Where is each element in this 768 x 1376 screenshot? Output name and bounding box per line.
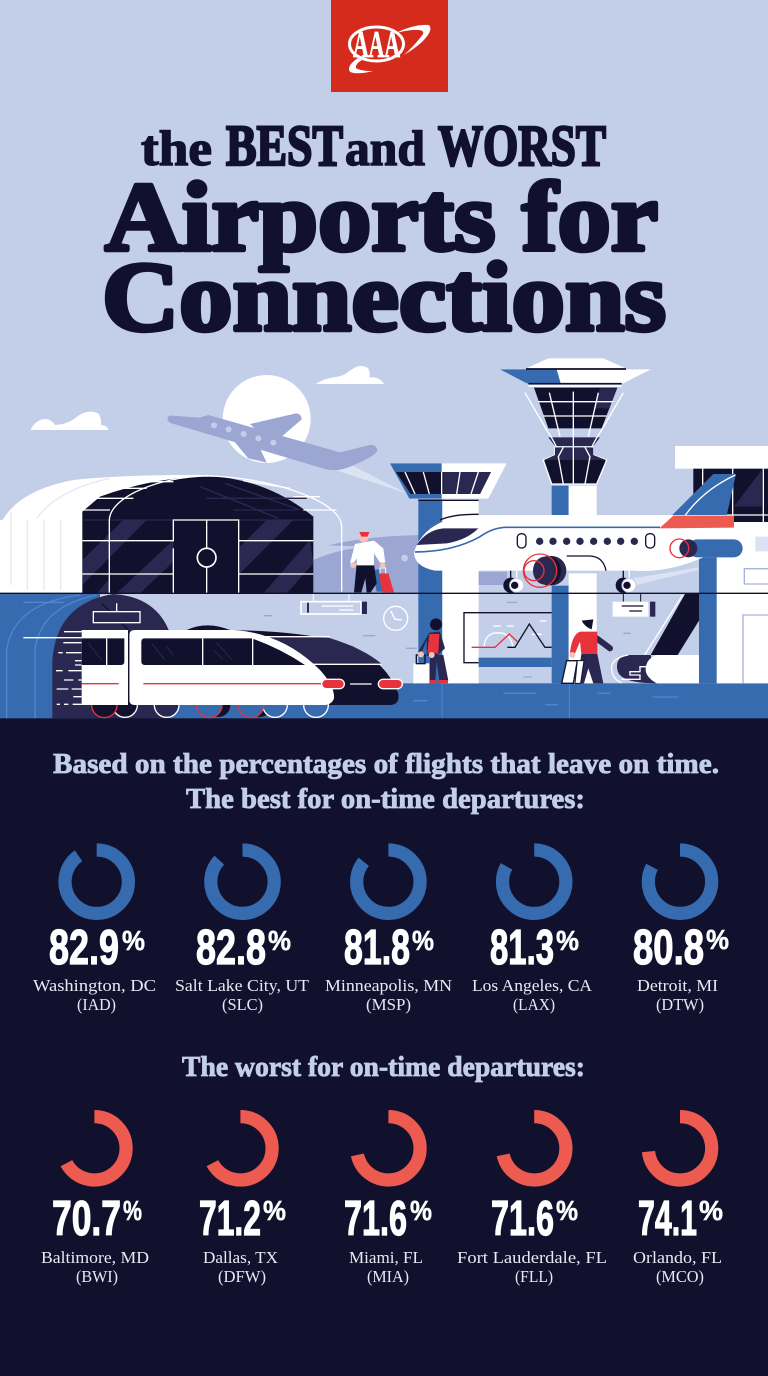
value: 71.6 [344,1192,407,1246]
value: 80.8 [633,921,704,975]
intro line 1: Based on the percentages of flights that leave on time. [53,749,719,780]
label [325,976,452,1014]
departures board [464,613,552,667]
cloud middle [316,366,384,384]
label: Baltimore, MD [41,1248,149,1267]
terminal building right [675,446,768,683]
stat: DTW [633,850,729,1014]
value: 82.8 [196,921,266,975]
label: Orlando, FL [633,1248,722,1267]
ground line [0,591,768,595]
stat: BWI [41,1117,149,1286]
label: Los Angeles, CA [472,976,592,995]
ring [63,1117,126,1180]
value: 71.2 [199,1192,261,1246]
section: best airports [33,850,729,1014]
label [457,1248,607,1286]
value: % [699,1195,723,1226]
traveller with bag [413,618,448,683]
AAA logo: AAA [353,24,400,66]
traveller with suitcase [350,532,394,592]
label: (SLC) [222,995,263,1014]
value: 74.1 [638,1192,697,1246]
label [203,1248,278,1286]
label: Dallas, TX [203,1248,278,1267]
traveller walking [562,619,610,683]
value: 81.8 [344,921,410,975]
distant hills [313,535,420,593]
stat: MCO [633,1117,723,1286]
label: (MIA) [367,1267,409,1286]
escalator [612,594,699,683]
title [102,113,666,352]
title line: the best and worst: BEST [226,113,343,178]
airplane in sky [168,413,377,470]
stat: SLC [175,850,309,1014]
train wheels [92,692,328,718]
jet pillar [699,553,717,683]
value: % [122,925,145,956]
ring [65,850,128,913]
section: worst airports [41,1117,723,1286]
ring [648,850,712,913]
label: Minneapolis, MN [325,976,452,995]
AAA logo [331,0,448,92]
stat: MSP [325,850,452,1014]
label [633,1248,722,1286]
label [175,976,309,1014]
stat: DFW [199,1117,286,1286]
label [33,976,156,1014]
title line: the best and worst [141,113,606,178]
label: (LAX) [513,995,555,1014]
worst heading: The worst for on-time departures: [182,1052,585,1083]
value: % [412,925,434,956]
ring [648,1117,712,1180]
label: (IAD) [77,995,116,1014]
hanging sign left [301,594,367,614]
label: (MCO) [656,1267,704,1286]
ring [503,1117,566,1180]
label: (MSP) [366,995,411,1014]
white terminal left [0,475,213,593]
ring [357,1117,420,1180]
front train [82,630,402,705]
intro line 2: The best for on-time departures: [186,784,585,815]
stat: MIA [344,1117,432,1286]
clock [384,606,408,630]
value: % [263,1195,286,1226]
value: % [556,925,579,956]
rear train [187,625,399,717]
parked jet [414,474,743,587]
control tower large [500,358,651,519]
label: Washington, DC [33,976,156,995]
column under plane [552,573,597,683]
label: (DTW) [656,995,704,1014]
label: (BWI) [76,1267,118,1286]
periwinkle block [479,572,507,585]
jet landing gear [503,570,636,593]
label [637,976,718,1014]
title line: airports for: Airports for [105,163,658,272]
stat: IAD [33,850,156,1014]
value: 70.7 [52,1192,121,1246]
label: (DFW) [218,1267,266,1286]
ring [211,850,274,913]
cloud right [419,513,515,534]
label [41,1248,149,1286]
cloud left [31,412,108,430]
label: Detroit, MI [637,976,718,995]
label: Fort Lauderdale, FL [457,1248,607,1267]
sun [223,375,311,463]
value: % [268,925,291,956]
ring [502,850,566,913]
label [472,976,592,1014]
title line: connections: Connections [102,243,666,352]
value: % [410,1195,432,1226]
value: 81.3 [490,921,554,975]
value: 71.6 [491,1192,554,1246]
stat: FLL [457,1117,607,1286]
airport illustration [0,358,768,718]
floor [170,683,768,718]
value: % [706,924,729,955]
ring [357,850,420,913]
label: Salt Lake City, UT [175,976,309,995]
label [349,1248,423,1286]
dark hangar [82,476,342,593]
ring [209,1117,272,1180]
value: % [123,1195,142,1226]
control tower small [390,463,507,683]
label: (FLL) [515,1267,553,1286]
label: Miami, FL [349,1248,423,1267]
value: 82.9 [49,921,119,975]
intro heading [53,749,719,815]
hanging sign right [613,594,655,617]
stat: LAX [472,850,592,1014]
title line: the best and worst: the [141,120,212,176]
lower concourse: blue tunnel [0,594,170,718]
value: % [556,1195,578,1226]
beam [633,567,698,585]
title line: the best and worst: WORST [438,113,606,178]
title line: the best and worst: and [345,120,425,176]
contrail [333,466,408,494]
